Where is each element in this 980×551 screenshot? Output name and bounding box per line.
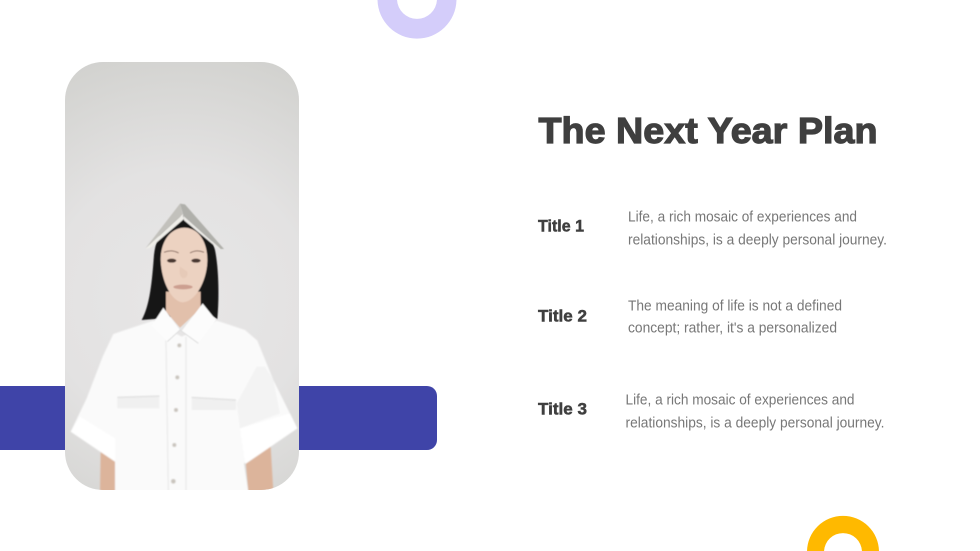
placket — [166, 337, 186, 492]
neck — [166, 292, 201, 328]
item 2 text: The meaning of life is not a defined — [628, 298, 842, 314]
shirt — [71, 321, 297, 492]
item 1 text: Life, a rich mosaic of experiences and — [628, 210, 857, 226]
pockets — [118, 397, 158, 408]
collar — [154, 307, 180, 333]
item 2 — [538, 298, 842, 336]
arms — [100, 450, 115, 492]
item 3 text: Life, a rich mosaic of experiences and — [626, 392, 854, 408]
item 1 — [538, 210, 887, 248]
eyes — [167, 259, 176, 263]
item 3 heading: Title 3 — [538, 400, 587, 418]
buttons — [171, 343, 181, 484]
book — [180, 204, 224, 249]
lips — [173, 285, 193, 289]
item 1 heading: Title 1 — [538, 216, 584, 236]
item 2 text: concept; rather, it's a personalized — [628, 320, 837, 336]
indigo bar behind photo — [0, 386, 437, 450]
title: The Next Year Plan — [538, 110, 878, 151]
decorative ring: lavender top — [378, 0, 456, 39]
item 3 text: relationships, is a deeply personal journey. — [626, 416, 884, 432]
item 3 — [538, 392, 884, 432]
hair — [142, 216, 218, 320]
nose shade — [180, 268, 186, 277]
decorative ring: yellow bottom — [807, 516, 879, 551]
item 2 heading: Title 2 — [538, 306, 587, 326]
sleeve shade — [237, 367, 280, 428]
item 1 text: relationships, is a deeply personal journey. — [628, 232, 887, 248]
photo: woman with a book on her head — [65, 62, 299, 492]
face — [161, 228, 207, 302]
